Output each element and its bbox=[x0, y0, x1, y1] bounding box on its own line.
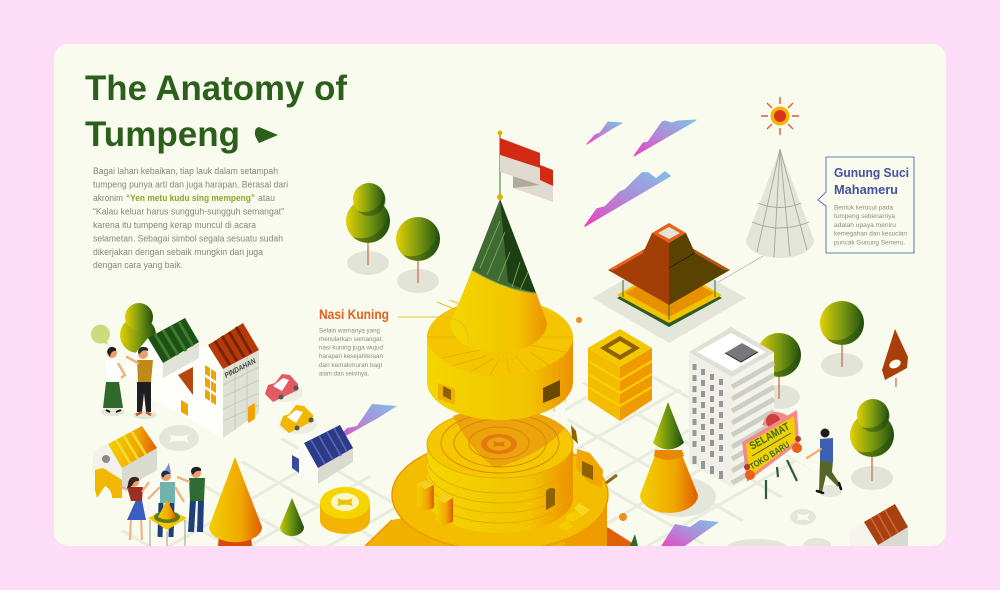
speech bubble bbox=[91, 325, 110, 345]
banana leaf cone top bbox=[472, 199, 536, 293]
yellow cone with green top bbox=[640, 402, 716, 517]
callout: Gunung Suci Mahameru: tumpeng sebenarnya bbox=[834, 213, 895, 220]
small green cone bbox=[280, 498, 304, 536]
intro text: karena itu tumpeng kerap muncul di acara bbox=[93, 220, 257, 231]
person: woman in sarong bbox=[101, 347, 125, 416]
cloud: top small bbox=[587, 122, 622, 144]
base tier bbox=[365, 495, 638, 546]
card panel bbox=[54, 44, 946, 546]
house: blue roof bbox=[292, 425, 353, 484]
car: red bbox=[265, 374, 303, 402]
intro text bbox=[93, 166, 288, 271]
callout: Gunung Suci Mahameru: kemegahan dan kesucian bbox=[834, 230, 907, 238]
intro text: atau bbox=[258, 193, 275, 204]
callout: Gunung Suci Mahameru: Mahameru bbox=[834, 182, 898, 197]
Mahameru cone bbox=[746, 149, 814, 258]
pavilion (joglo) bbox=[592, 223, 746, 343]
callout: Gunung Suci Mahameru bbox=[818, 157, 914, 253]
cloud: near blue house bbox=[344, 404, 397, 436]
leader line: Nasi Kuning bbox=[398, 317, 468, 345]
big house: Pindahan: PINDAHAN bbox=[223, 356, 258, 380]
big house: Pindahan bbox=[123, 318, 259, 438]
title bbox=[85, 69, 347, 154]
callout: Nasi Kuning: harapan kesejahteraan bbox=[319, 353, 383, 360]
party table with mini tumpeng bbox=[148, 500, 187, 546]
intro text: dengan cara yang baik. bbox=[93, 260, 183, 271]
tree: behind tower bbox=[757, 333, 801, 409]
tree: right top bbox=[820, 301, 864, 377]
cloud: top large bbox=[634, 120, 696, 156]
cloud: middle bbox=[585, 172, 670, 226]
second tier bbox=[427, 408, 573, 533]
callout: Gunung Suci Mahameru: Gunung Suci bbox=[834, 165, 909, 180]
street grid bbox=[95, 365, 820, 546]
person: boy with party hat bbox=[148, 463, 184, 537]
main tumpeng model bbox=[365, 199, 638, 551]
intro text: “Yen metu kudu sing mempeng” bbox=[126, 193, 255, 204]
callout: Gunung Suci Mahameru: adalah upaya meniru bbox=[834, 222, 896, 229]
callout: Gunung Suci Mahameru: puncak Gunung Semeru. bbox=[834, 240, 905, 246]
big yellow cone bbox=[209, 457, 262, 546]
callout: Nasi Kuning: menularkan semangat, bbox=[319, 336, 383, 343]
person: man in green shirt bbox=[177, 467, 205, 532]
house: yellow roof bbox=[93, 426, 157, 498]
callout: Nasi Kuning: Selain warnanya yang bbox=[319, 328, 380, 334]
intro text: Bagai lahan kebaikan, tiap lauk dalam setampah bbox=[93, 166, 278, 177]
callout: Nasi Kuning: dan kemakmuran bagi bbox=[319, 362, 382, 369]
tree: group left bbox=[120, 303, 156, 353]
third tier bbox=[392, 439, 608, 551]
cloud: bottom bbox=[660, 520, 719, 548]
callout: Gunung Suci Mahameru: Bentuk kerucut pada bbox=[834, 204, 893, 212]
welcome sign bbox=[742, 410, 802, 499]
callout: Nasi Kuning bbox=[319, 306, 389, 378]
tree: single bbox=[396, 217, 440, 293]
intro text: “Kalau keluar harus sungguh-sungguh semangat” bbox=[93, 206, 284, 218]
person: man in mustard shirt bbox=[127, 347, 157, 419]
accent dots bbox=[576, 317, 627, 521]
gold coin bbox=[320, 487, 370, 534]
leader line: cone to pavilion bbox=[715, 256, 763, 284]
intro text: tumpeng punya arti dan juga harapan. Berasal dari bbox=[93, 180, 288, 190]
flag bbox=[497, 130, 553, 202]
title: Tumpeng bbox=[85, 115, 240, 154]
illustration scene bbox=[91, 97, 914, 555]
gold block stack bbox=[588, 329, 652, 421]
sun icon bbox=[761, 97, 799, 135]
top cylinder bbox=[427, 299, 573, 420]
title: The Anatomy of bbox=[85, 69, 347, 108]
icon: title arrow bbox=[255, 127, 278, 143]
person walking bbox=[807, 428, 842, 497]
callout: Nasi Kuning: alam dan seisinya. bbox=[319, 370, 369, 378]
callout: Nasi Kuning: Nasi Kuning bbox=[319, 306, 389, 322]
intro text: selametan. Sebagai simbol segala sesuatu sudah bbox=[93, 234, 283, 244]
house: bottom right bbox=[864, 504, 908, 546]
welcome sign: SELAMAT bbox=[748, 421, 792, 453]
person: woman in blue skirt bbox=[120, 477, 149, 540]
tree: double left bbox=[346, 183, 390, 275]
yellow rice cone bbox=[450, 270, 547, 353]
car: yellow bbox=[279, 405, 317, 434]
tower building bbox=[689, 327, 774, 488]
welcome sign: TOKO BARU bbox=[748, 439, 791, 472]
bird house icon bbox=[882, 329, 908, 387]
intro text: dikerjakan dengan sebaik mungkin dan juga bbox=[93, 247, 264, 258]
intro text: akronim bbox=[93, 193, 123, 204]
tree: double right bbox=[850, 399, 894, 490]
street coin markers bbox=[159, 425, 831, 555]
callout: Nasi Kuning: nasi kuning juga wujud bbox=[319, 344, 383, 352]
small blocks on tiers bbox=[417, 425, 617, 531]
